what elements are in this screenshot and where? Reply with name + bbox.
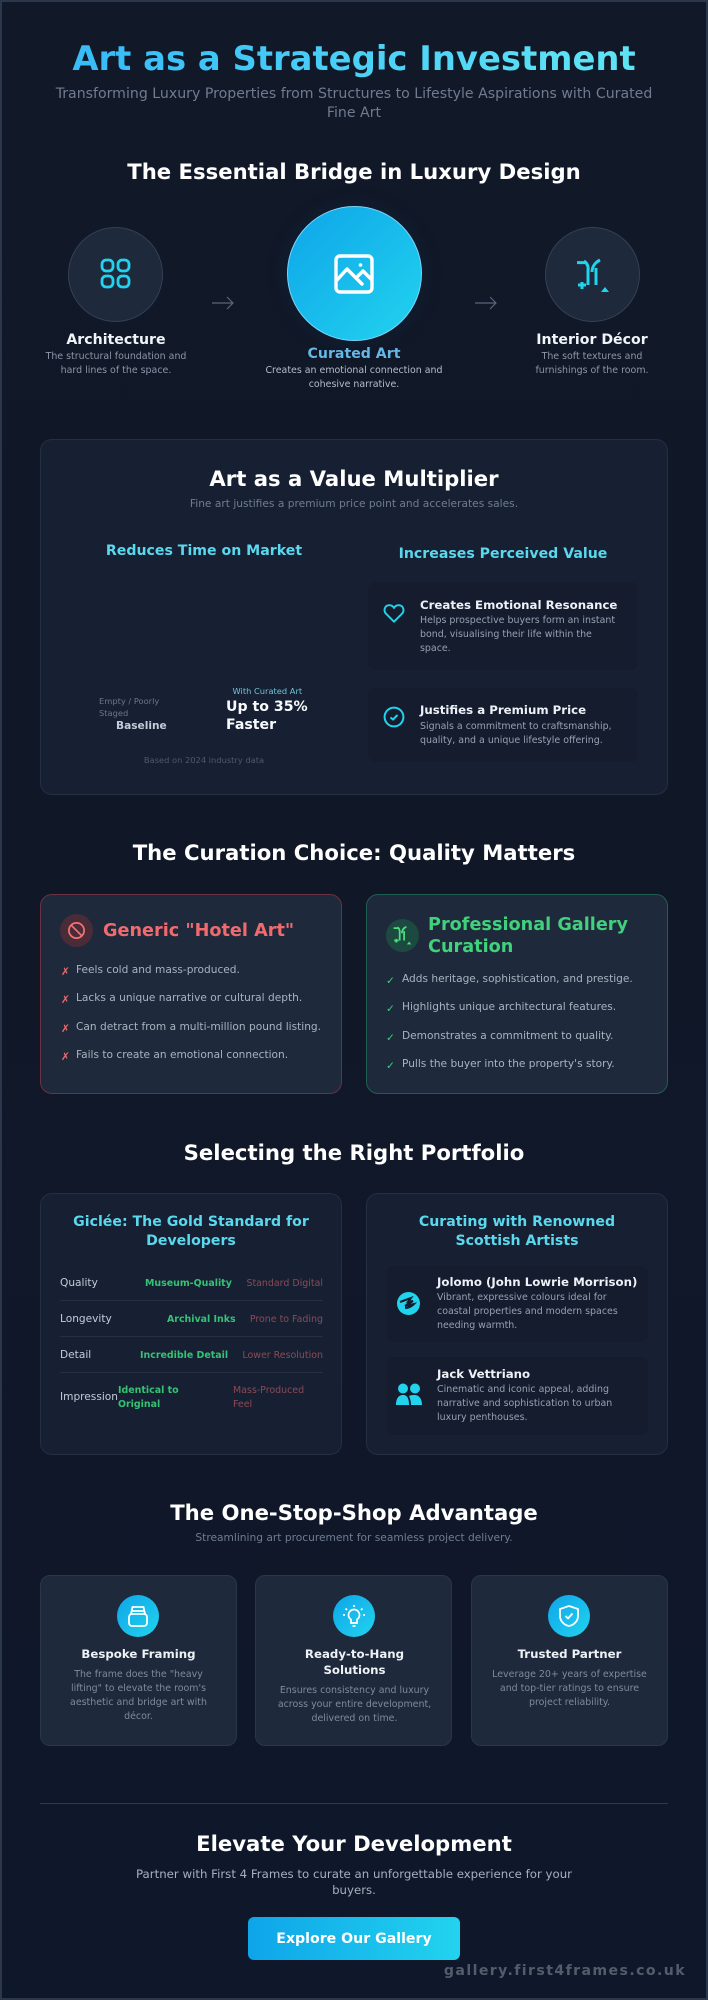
text: bespoke framing: aesthetic and bridge art with xyxy=(70,1697,207,1708)
card: ready to hang xyxy=(255,1575,452,1746)
text: vettriano: Cinematic and iconic appeal, adding xyxy=(437,1384,609,1395)
text: jolomo: Vibrant, expressive colours ideal for xyxy=(437,1292,607,1303)
text: trusted partner: and top-tier ratings to ensure xyxy=(500,1683,639,1694)
text: emotional resonance: Helps prospective buyers form an instant xyxy=(420,615,615,626)
card: bespoke framing xyxy=(40,1575,237,1746)
card: vettriano xyxy=(386,1357,648,1435)
subtitle: Fine Art xyxy=(327,105,381,121)
list: hotel art drawbacks: ✗ xyxy=(61,1051,70,1063)
heading: essential bridge: The Essential Bridge in Luxury Design xyxy=(127,159,581,184)
icon: gallery circle xyxy=(386,919,419,952)
table: giclee comparison: Feel xyxy=(233,1399,252,1410)
watermark: gallery.first4frames.co.uk xyxy=(444,1963,686,1979)
text: interior decor description: The soft textures and xyxy=(542,351,642,362)
title: giclee: Giclée: The Gold Standard for xyxy=(73,1214,309,1230)
text: up to 35 percent faster: Faster xyxy=(226,717,276,733)
title: emotional resonance: Creates Emotional Resonance xyxy=(420,598,617,612)
chart label: baseline xyxy=(99,696,167,732)
text: architecture description: hard lines of the space. xyxy=(61,365,171,376)
title: giclee: Developers xyxy=(146,1233,236,1249)
button: explore gallery xyxy=(248,1917,460,1960)
title: jolomo: Jolomo (John Lowrie Morrison) xyxy=(437,1275,637,1289)
text: vettriano xyxy=(437,1384,612,1423)
icon: lightbulb glyph xyxy=(343,1605,365,1627)
list: gallery benefits: Highlights unique architectural features. xyxy=(402,1001,616,1013)
table: giclee comparison: Standard Digital xyxy=(246,1278,323,1289)
table: giclee comparison xyxy=(60,1277,323,1410)
icon: framing glyph xyxy=(128,1606,148,1627)
panel: gallery curation xyxy=(366,894,668,1094)
text: empty staged: Staged xyxy=(99,708,128,718)
table: giclee comparison: Mass-Produced xyxy=(233,1385,304,1396)
list: gallery benefits: ✓ xyxy=(386,975,395,987)
table: giclee comparison: Original xyxy=(118,1399,160,1410)
icon: interior decor circle xyxy=(545,227,640,322)
text: bespoke framing: décor. xyxy=(124,1711,153,1722)
card: emotional resonance xyxy=(368,582,638,670)
title: giclee xyxy=(73,1214,309,1249)
heading: curation choice: The Curation Choice: Quality Matters xyxy=(133,840,575,865)
card: trusted partner xyxy=(471,1575,668,1746)
list: hotel art drawbacks xyxy=(61,964,321,1063)
text: call to action: buyers. xyxy=(332,1883,376,1897)
icon: jolomo xyxy=(397,1292,420,1315)
list: gallery benefits: Pulls the buyer into the property's story. xyxy=(402,1058,615,1070)
text: emotional resonance: space. xyxy=(420,643,451,654)
text: one stop shop subtitle: Streamlining art procurement for seamless project delivery. xyxy=(195,1531,513,1544)
text: jolomo: coastal properties and modern spaces xyxy=(437,1306,618,1317)
text: bespoke framing xyxy=(70,1669,207,1722)
text: with curated art: With Curated Art xyxy=(232,686,302,696)
row: impression: Impression xyxy=(60,1391,118,1403)
title: Art as a Strategic Investment xyxy=(72,39,636,78)
list: hotel art drawbacks: Feels cold and mass-produced. xyxy=(76,964,240,976)
label: curated art: Curated Art xyxy=(308,346,400,362)
list: hotel art drawbacks: ✗ xyxy=(61,1023,70,1035)
chart label: with curated art xyxy=(226,686,308,733)
text: call to action xyxy=(136,1867,572,1897)
icon: decor glyph xyxy=(577,258,609,292)
text: interior decor description: furnishings of the room. xyxy=(535,365,649,376)
heading: value multiplier: Art as a Value Multiplier xyxy=(209,466,499,491)
text: empty staged: Empty / Poorly xyxy=(99,696,159,706)
title: gallery curation: Curation xyxy=(428,937,513,957)
title: gallery curation xyxy=(428,915,628,957)
title: ready to hang: Ready-to-Hang xyxy=(305,1647,404,1661)
list: gallery benefits: Demonstrates a commitment to quality. xyxy=(402,1030,613,1042)
text: ready to hang xyxy=(278,1685,431,1724)
table: giclee comparison: Identical to xyxy=(118,1385,179,1396)
list: gallery benefits: ✓ xyxy=(386,1060,395,1072)
card: premium price xyxy=(368,688,638,762)
icon: prohibited glyph xyxy=(68,922,85,939)
icon: shield glyph xyxy=(559,1605,579,1627)
row: quality: Quality xyxy=(60,1277,98,1289)
text: architecture description xyxy=(46,351,186,376)
heading: one stop shop: The One-Stop-Shop Advantage xyxy=(170,1500,538,1525)
list: gallery benefits: Adds heritage, sophistication, and prestige. xyxy=(402,973,633,985)
text: data note: Based on 2024 industry data xyxy=(144,755,264,765)
text: jolomo: needing warmth. xyxy=(437,1320,517,1331)
table: giclee comparison: Prone to Fading xyxy=(250,1314,323,1325)
text: up to 35 percent faster xyxy=(226,699,308,733)
text: trusted partner: project reliability. xyxy=(529,1697,610,1708)
icon: framed picture xyxy=(334,254,374,294)
text: bespoke framing: The frame does the "heavy xyxy=(74,1669,203,1680)
heading: elevate: Elevate Your Development xyxy=(196,1831,512,1856)
title: ready to hang: Solutions xyxy=(323,1663,386,1677)
text: curated art description xyxy=(265,365,443,390)
text: call to action: Partner with First 4 Frames to curate an unforgettable experience for your xyxy=(136,1867,572,1881)
list: hotel art drawbacks: Lacks a unique narrative or cultural depth. xyxy=(76,992,302,1004)
text: empty staged xyxy=(99,696,159,718)
list: gallery benefits xyxy=(386,973,633,1072)
icon: prohibited xyxy=(60,914,93,947)
text: emotional resonance xyxy=(420,615,615,654)
row: longevity: Longevity xyxy=(60,1313,112,1325)
text: trusted partner: Leverage 20+ years of expertise xyxy=(492,1669,647,1680)
icon: architecture circle xyxy=(68,227,163,322)
text: jolomo xyxy=(437,1292,618,1331)
icon: framing xyxy=(117,1595,159,1637)
panel: giclee xyxy=(40,1193,342,1455)
list: hotel art drawbacks: ✗ xyxy=(61,966,70,978)
title: ready to hang xyxy=(305,1647,404,1677)
icon: gallery glyph xyxy=(394,926,412,944)
text: premium price xyxy=(420,721,612,746)
title: scottish artists: Scottish Artists xyxy=(455,1233,579,1249)
text: architecture description: The structural foundation and xyxy=(46,351,186,362)
text: premium price: Signals a commitment to craftsmanship, xyxy=(420,721,612,732)
text: vettriano: narrative and sophistication to urban xyxy=(437,1398,612,1409)
title: hotel art: Generic "Hotel Art" xyxy=(103,921,294,941)
subtitle xyxy=(56,86,652,121)
text: premium price: quality, and a unique lifestyle offering. xyxy=(420,735,603,746)
table: giclee comparison: Incredible Detail xyxy=(140,1350,228,1361)
text: ready to hang: delivered on time. xyxy=(312,1713,397,1724)
subtitle: Transforming Luxury Properties from Structures to Lifestyle Aspirations with Curated xyxy=(56,86,652,102)
text: interior decor description xyxy=(535,351,649,376)
icon: lightbulb xyxy=(333,1595,375,1637)
title: scottish artists xyxy=(419,1214,615,1249)
text: up to 35 percent faster: Up to 35% xyxy=(226,699,308,715)
label: interior decor: Interior Décor xyxy=(536,332,648,348)
title: bespoke framing: Bespoke Framing xyxy=(81,1647,196,1661)
title: vettriano: Jack Vettriano xyxy=(437,1367,530,1381)
table: giclee comparison: Lower Resolution xyxy=(242,1350,323,1361)
title: gallery curation: Professional Gallery xyxy=(428,915,628,935)
card: jolomo xyxy=(386,1266,648,1342)
text: emotional resonance: bond, visualising their life within the xyxy=(420,629,592,640)
row: detail: Detail xyxy=(60,1349,91,1361)
panel: value multiplier xyxy=(40,439,668,795)
icon: check circle xyxy=(384,706,404,728)
icon: heart xyxy=(384,604,404,623)
heading: portfolio: Selecting the Right Portfolio xyxy=(184,1140,524,1165)
icon: grid squares xyxy=(100,258,130,288)
list: hotel art drawbacks: Can detract from a multi-million pound listing. xyxy=(76,1021,321,1033)
subheading: perceived value: Increases Perceived Value xyxy=(399,546,607,562)
text: baseline: Baseline xyxy=(116,720,167,732)
table: giclee comparison: Archival Inks xyxy=(167,1314,236,1325)
arrow: art to decor xyxy=(475,296,497,310)
label: architecture: Architecture xyxy=(66,332,166,348)
list: gallery benefits: ✓ xyxy=(386,1003,395,1015)
subheading: reduces time: Reduces Time on Market xyxy=(106,543,302,559)
panel: hotel art xyxy=(40,894,342,1094)
title: scottish artists: Curating with Renowned xyxy=(419,1214,615,1230)
text: value multiplier subtitle: Fine art justifies a premium price point and accelerates sales. xyxy=(190,497,518,510)
arrow: architecture to art xyxy=(212,296,234,310)
list: gallery benefits: ✓ xyxy=(386,1032,395,1044)
text: ready to hang: Ensures consistency and luxury xyxy=(280,1685,429,1696)
icon: people xyxy=(396,1384,422,1405)
text: curated art description: cohesive narrative. xyxy=(309,379,399,390)
list: hotel art drawbacks: ✗ xyxy=(61,994,70,1006)
text: bespoke framing: lifting" to elevate the room's xyxy=(71,1683,206,1694)
bridge node: architecture xyxy=(68,227,163,322)
icon: shield xyxy=(548,1595,590,1637)
icon: curated art circle xyxy=(286,206,422,341)
title: premium price: Justifies a Premium Price xyxy=(420,703,586,717)
text: ready to hang: across your entire development, xyxy=(278,1699,431,1710)
table: giclee comparison: Museum-Quality xyxy=(145,1278,232,1289)
button label: Explore Our Gallery xyxy=(276,1931,432,1947)
list: hotel art drawbacks: Fails to create an emotional connection. xyxy=(76,1049,288,1061)
text: trusted partner xyxy=(492,1669,647,1708)
panel: scottish artists xyxy=(366,1193,668,1455)
text: curated art description: Creates an emotional connection and xyxy=(265,365,443,376)
title: trusted partner: Trusted Partner xyxy=(518,1647,621,1661)
text: vettriano: luxury penthouses. xyxy=(437,1412,528,1423)
